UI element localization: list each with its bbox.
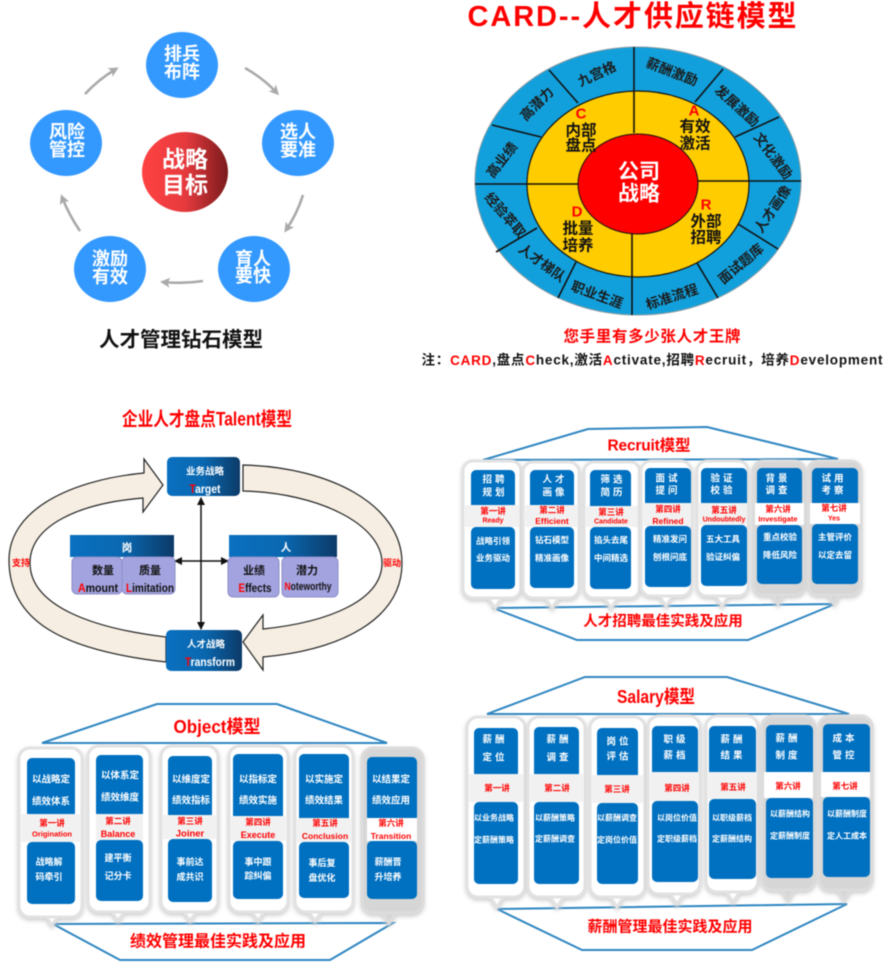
column 1: 以战略定	[32, 774, 70, 786]
inner quadrant labels: 培养	[562, 236, 594, 254]
column 2: 第二讲	[105, 816, 131, 826]
node: 育人要快: 育人	[235, 248, 271, 269]
label: 支持: 支持	[12, 557, 30, 568]
column 5: 薪酬	[720, 734, 746, 746]
table: people 人: 人	[281, 542, 292, 554]
heading: 企业人才盘点Talent模型	[122, 408, 292, 430]
column 3	[584, 462, 640, 608]
column 2: 以薪酬策略	[535, 812, 575, 822]
column 7: 以定去留	[818, 550, 852, 560]
column 3: Joiner	[176, 828, 205, 840]
column 1: 业务驱动	[476, 553, 510, 563]
column 1: 绩效体系	[32, 796, 70, 808]
column 3: 绩效指标	[172, 794, 210, 806]
column 7: Yes	[828, 516, 840, 522]
column 5	[697, 461, 748, 606]
column 6: 定薪酬制度	[770, 830, 810, 840]
column 4: 绩效实施	[239, 794, 277, 806]
column 4: 提问	[655, 484, 681, 496]
column 2: 第二讲	[544, 783, 570, 793]
node: 风险管控: 风险	[49, 121, 85, 142]
column 4: 以岗位价值	[657, 812, 697, 822]
outer ring labels: 人才梯队	[516, 240, 569, 285]
table: people 人: 潜力	[296, 563, 318, 577]
column 3: 第三讲	[598, 507, 624, 517]
column 4: 第四讲	[664, 783, 690, 793]
heading: Object模型	[174, 717, 260, 737]
column 2	[88, 746, 150, 921]
column 4	[641, 461, 691, 606]
column 3: Candidate	[594, 518, 628, 526]
column 7: 定人工成本	[827, 830, 867, 840]
column 6	[362, 748, 423, 923]
column 5: 第五讲	[711, 505, 737, 515]
column 2: 绩效维度	[101, 792, 139, 804]
outer ring labels: 文化激励	[751, 129, 796, 182]
inner quadrant labels: 招聘	[690, 228, 722, 246]
column 2: 钻石模型	[535, 535, 569, 545]
column 5: 以实施定	[305, 774, 343, 786]
column 6: 第六讲	[775, 781, 801, 791]
arrow: support loop	[9, 459, 166, 662]
column 2: Efficient	[535, 516, 569, 526]
heading: Recruit模型	[608, 436, 690, 454]
box: business strategy Target: 业务战略	[186, 466, 224, 478]
column 5: Conclusion	[302, 831, 348, 841]
column 2: 以体系定	[101, 770, 139, 782]
column 7	[819, 716, 872, 900]
column 2: 人才	[542, 474, 568, 486]
outer ring labels: 经验萃取	[482, 189, 529, 241]
column 3: 岗位	[606, 736, 632, 748]
column 4	[229, 746, 288, 921]
frame: top trapezoid	[487, 677, 849, 714]
inner quadrant labels	[562, 102, 722, 254]
column 4: Execute	[241, 830, 275, 840]
column 6: 薪酬	[775, 732, 801, 744]
column 1: 战略引领	[476, 536, 510, 546]
column 7: 第七讲	[821, 503, 847, 513]
table: position 岗: 岗	[122, 541, 132, 554]
column 5: 五大工具	[706, 534, 740, 544]
center node: 战略目标	[142, 132, 228, 212]
column 6	[753, 461, 805, 604]
column 2	[528, 717, 585, 907]
box: talent strategy Transform: 人才战略	[187, 638, 225, 650]
node: 激励有效: 有效	[92, 267, 128, 287]
node: 选人要准: 选人	[280, 122, 316, 142]
column 4: 事中跟	[244, 856, 272, 867]
column 6: 以薪酬结构	[770, 808, 810, 818]
column 1	[463, 461, 521, 608]
column 3	[161, 746, 218, 921]
column 1: 战略解	[35, 856, 63, 867]
column 3: 成共识	[176, 871, 204, 882]
column 4: Refined	[652, 516, 684, 526]
inner quadrant labels: R	[701, 196, 712, 214]
table: people 人: 业绩	[243, 563, 265, 577]
column 3: 以薪酬调查	[597, 812, 637, 822]
column 5: 验证纠偏	[706, 552, 740, 562]
inner quadrant labels: 内部	[565, 120, 597, 140]
node: 排兵布阵: 排兵	[164, 44, 200, 64]
heading: 人才管理钻石模型: 人才管理钻石模型	[99, 328, 263, 352]
column 3: 事前达	[176, 856, 204, 867]
column 6: Transition	[371, 831, 411, 841]
column 1: Origination	[32, 830, 72, 838]
column 4	[648, 716, 700, 904]
column 6: 制度	[775, 750, 801, 762]
column 4: 第四讲	[655, 504, 681, 514]
column 4: 薪档	[663, 750, 689, 762]
panel: talent management diamond model	[30, 32, 334, 352]
column 2	[523, 462, 579, 608]
column 4: 精准发问	[653, 534, 687, 544]
chart: concentric CARD circles	[475, 47, 801, 315]
column 6: Investigate	[758, 514, 798, 524]
column 5: 盘优化	[308, 872, 336, 883]
outer ring labels: 人才画像	[751, 181, 795, 236]
inner quadrant labels: 外部	[690, 212, 722, 230]
center label: 公司战略	[618, 160, 660, 206]
box: business strategy Target	[167, 457, 240, 496]
inner quadrant labels: C	[576, 106, 587, 122]
center node: 战略目标: 战略	[162, 146, 208, 172]
column 3: 定岗位价值	[597, 834, 637, 844]
table: position 岗	[70, 535, 175, 595]
column 5: 第五讲	[312, 818, 338, 828]
node: 排兵布阵: 布阵	[164, 62, 200, 82]
table: position 岗: Limitation	[126, 581, 174, 595]
column 3: 筛选	[600, 474, 626, 486]
node: 排兵布阵	[146, 32, 218, 98]
column 2: 精准画像	[535, 553, 569, 563]
column 6: 第六讲	[378, 818, 404, 828]
column 3: 中间精选	[594, 553, 628, 563]
column 3: 掐头去尾	[594, 535, 628, 545]
column 3: 第三讲	[604, 784, 630, 794]
column 6: 背景	[765, 472, 791, 484]
column 3: 简历	[600, 486, 626, 498]
panel: Talent inventory model	[9, 408, 402, 671]
outer ring labels: 高潜力	[517, 84, 557, 124]
column 5: 校验	[710, 484, 736, 496]
node: 育人要快: 要快	[235, 266, 271, 286]
table: people 人: Noteworthy	[284, 581, 332, 593]
panel: Salary model	[467, 677, 872, 950]
column 6: 第六讲	[765, 504, 791, 514]
column 7: 主管评价	[818, 532, 852, 542]
frame: top trapezoid	[483, 427, 838, 460]
note: 注：CARD,盘点Check,激活Activate,招聘Recruit，培养Development	[422, 352, 883, 368]
table: people 人	[228, 535, 338, 597]
column 6: 重点校验	[763, 532, 797, 542]
column 7: 第七讲	[832, 781, 858, 791]
column 5: 第五讲	[720, 782, 746, 792]
node: 选人要准	[262, 110, 334, 176]
column 4: 踪纠偏	[244, 870, 272, 881]
outer ring labels	[482, 54, 796, 312]
column 2: Balance	[101, 829, 135, 839]
outer ring labels: 九宫格	[575, 58, 619, 89]
inner quadrant labels: 批量	[562, 220, 594, 238]
subtitle: 您手里有多少张人才王牌	[564, 326, 740, 346]
column 5: 事后复	[308, 857, 336, 868]
column 1: 第一讲	[484, 783, 510, 793]
column 7: 以薪酬制度	[827, 808, 867, 818]
table: people 人: Effects	[238, 581, 272, 595]
table: position 岗: Amount	[78, 581, 118, 595]
frame: bottom trapezoid	[493, 604, 835, 640]
outer ring labels: 薪酬激励	[644, 54, 700, 89]
column 6	[762, 716, 815, 900]
column 3: 评估	[606, 750, 632, 762]
column 1: 定薪酬策略	[474, 834, 514, 844]
frame: bottom trapezoid	[497, 904, 847, 950]
column 2: 记分卡	[104, 870, 132, 881]
column 7: 考察	[821, 484, 847, 496]
column 5: Undoubtedly	[703, 516, 745, 524]
column 5: 验证	[710, 472, 736, 484]
column 2: 定薪酬调查	[535, 834, 575, 844]
outer ring labels: 面试题库	[715, 240, 767, 287]
inner quadrant labels: 盘点	[565, 136, 597, 154]
footer heading: 薪酬管理最佳实践及应用	[587, 918, 753, 936]
outer ring labels: 高业绩	[483, 138, 521, 181]
column 1	[467, 717, 525, 907]
column 7: 成本	[832, 732, 858, 744]
panel: Object model	[19, 704, 423, 960]
column 5	[295, 746, 353, 921]
column 4: 定职级薪档	[657, 834, 697, 844]
node: 激励有效	[74, 236, 146, 302]
column 4: 第四讲	[245, 817, 271, 827]
column 1: Ready	[482, 518, 504, 524]
column 5: 以职级薪档	[712, 812, 752, 822]
inner quadrant labels: 有效	[679, 116, 711, 136]
box: talent strategy Transform	[166, 630, 242, 671]
column 4: 面试	[655, 472, 681, 484]
outer ring labels: 发展激励	[712, 82, 763, 130]
column 6: 降低风险	[763, 550, 797, 560]
column 7: 管控	[832, 750, 858, 762]
frame: bottom trapezoid	[53, 923, 393, 960]
footer heading: 绩效管理最佳实践及应用	[130, 932, 306, 950]
inner quadrant labels: 激活	[679, 134, 711, 152]
column 5: 定薪酬结构	[712, 834, 752, 844]
column 6: 升培养	[374, 871, 402, 882]
panel: Recruit model	[463, 427, 861, 640]
column 7	[808, 461, 861, 604]
inner quadrant labels: D	[572, 204, 583, 220]
column 2: 薪酬	[546, 734, 572, 746]
arrows: cycle between the five stages	[62, 68, 303, 283]
outer ring labels: 标准流程	[644, 280, 700, 312]
footer heading: 人才招聘最佳实践及应用	[583, 612, 743, 630]
column 1: 薪酬	[482, 734, 508, 746]
column 4: 职级	[663, 734, 689, 746]
inner quadrant labels: A	[689, 102, 700, 120]
column 1: 第一讲	[39, 818, 65, 828]
box: business strategy Target: Target	[190, 482, 221, 496]
center label: 公司战略: 战略	[618, 182, 660, 206]
column 6: 绩效应用	[372, 794, 410, 806]
table: position 岗: 数量	[92, 563, 114, 577]
center label: 公司战略: 公司	[618, 160, 660, 184]
column 1	[19, 748, 82, 925]
column 3: 以维度定	[172, 774, 210, 786]
node: 选人要准: 要准	[280, 140, 316, 160]
table: position 岗: 质量	[139, 563, 161, 577]
node: 风险管控	[30, 110, 102, 176]
column 1: 第一讲	[480, 506, 506, 516]
column 5: 绩效结果	[305, 794, 343, 806]
box: talent strategy Transform: Transform	[185, 655, 235, 669]
column 5: 结果	[720, 750, 746, 762]
column 2: 第二讲	[539, 505, 565, 515]
center node: 战略目标: 目标	[162, 172, 208, 198]
column 2: 画像	[542, 486, 568, 498]
column 2: 调查	[546, 752, 572, 764]
arrow: drive loop	[243, 465, 402, 670]
outer ring labels: 职业生涯	[569, 279, 625, 311]
frame: top trapezoid	[42, 704, 387, 743]
column 6: 以结果定	[372, 774, 410, 786]
column 1: 定位	[482, 752, 508, 764]
label: 驱动: 驱动	[383, 558, 401, 568]
arrows: vertical and horizontal connectors	[175, 498, 228, 629]
column 6: 薪酬晋	[374, 856, 402, 867]
column 6: 调查	[765, 484, 791, 496]
node: 风险管控: 管控	[49, 139, 85, 160]
heading: Salary模型	[617, 687, 695, 707]
node: 育人要快	[218, 236, 290, 302]
column 7: 试用	[821, 472, 847, 484]
panel: CARD talent supply chain model	[422, 0, 883, 368]
column 1: 规划	[482, 486, 508, 498]
column 4: 刨根问底	[653, 552, 687, 562]
column 5	[706, 716, 758, 902]
heading: CARD title: CARD--人才供应链模型	[468, 0, 796, 33]
column 1: 码牵引	[35, 871, 63, 882]
column 3	[590, 717, 645, 907]
column 1: 招聘	[482, 474, 508, 486]
column 3: 第三讲	[177, 816, 203, 826]
column 4: 以指标定	[239, 774, 277, 786]
column 1: 以业务战略	[474, 812, 514, 822]
node: 激励有效: 激励	[92, 249, 128, 269]
column 2: 建平衡	[104, 852, 132, 863]
